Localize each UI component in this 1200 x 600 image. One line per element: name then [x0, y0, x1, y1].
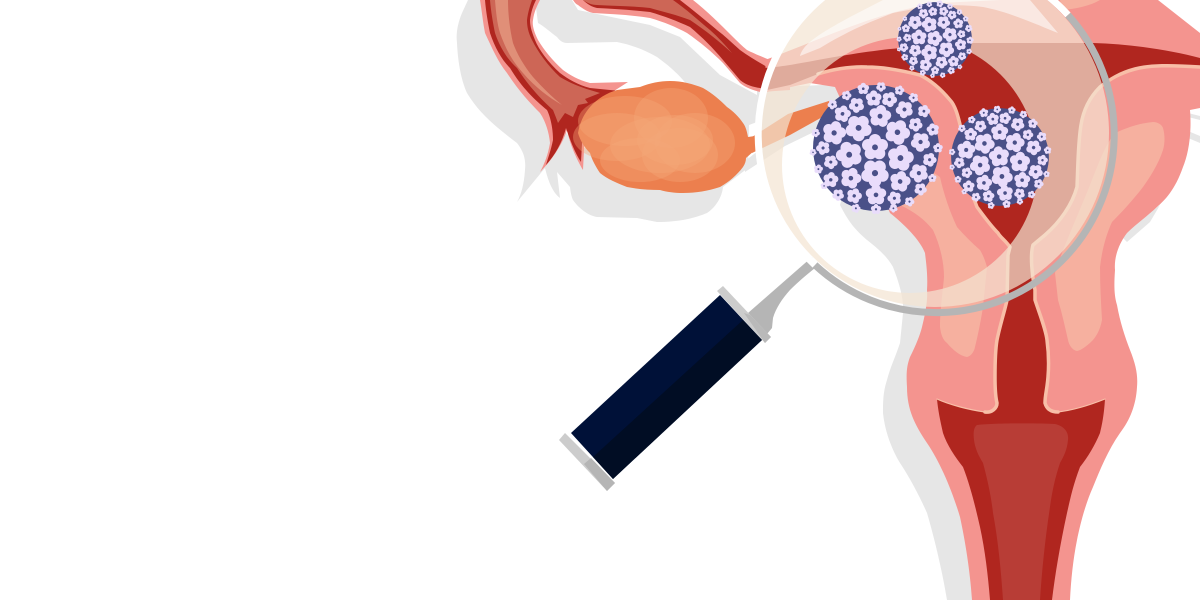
lens glare highlight: [800, 0, 1058, 56]
uterus: apricot stripe at top: [1060, 0, 1100, 10]
upper cap shade: [744, 313, 771, 343]
orange ligament right: [1180, 95, 1200, 108]
uterus: left muscle layer: [900, 150, 987, 357]
lower cap: [559, 433, 615, 491]
lower cap shade: [584, 458, 615, 491]
virus particle: right: [941, 97, 1058, 215]
uterus: outer wall: [765, 0, 1200, 600]
virus particle: top: [885, 0, 985, 89]
magnifier handle: [559, 257, 815, 491]
drop shadows: [457, 0, 1200, 600]
handle grip: [571, 295, 762, 479]
virus particle: large: [808, 80, 943, 214]
fallopian tube: orange ligament: [752, 100, 835, 153]
grip shadow side: [593, 320, 762, 479]
fallopian tube: left curl: [480, 0, 628, 172]
magnifier ring: [758, 0, 1114, 313]
handle neck: [748, 257, 815, 340]
upper cap: [717, 286, 771, 343]
vagina: inner lighter tissue: [974, 423, 1068, 600]
fallopian tube: upper right: [573, 0, 790, 92]
magnifier lens tint: [761, 0, 1109, 307]
uterus: right muscle layer: [1055, 122, 1164, 351]
ovary: [573, 81, 755, 193]
uterus: cavity and cervical canal: [760, 43, 1200, 600]
uterus: cream lining lines: [818, 66, 1200, 412]
